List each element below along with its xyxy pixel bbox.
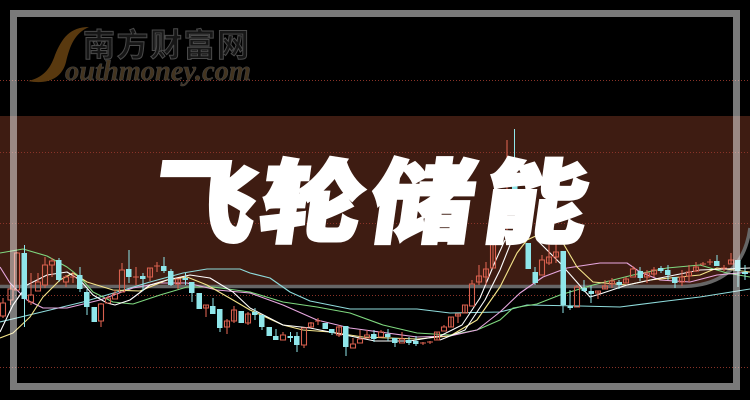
logo latin name: outhmoney.com	[65, 56, 251, 87]
title: 飞轮储能: 储	[364, 153, 481, 255]
candlestick chart	[0, 129, 750, 356]
cyan candles	[22, 129, 748, 356]
moving average lines	[0, 234, 750, 341]
red candles	[0, 140, 734, 348]
title: 飞轮储能: 能	[477, 153, 594, 255]
title: 飞轮储能	[146, 153, 594, 255]
title: 飞轮储能: 飞	[146, 153, 263, 255]
panel: title band	[0, 116, 750, 287]
title: 飞轮储能: 轮	[254, 153, 371, 255]
logo: southmoney	[28, 27, 251, 87]
logo chinese name: 南方财富网	[83, 27, 249, 63]
logo swoosh	[28, 27, 89, 82]
